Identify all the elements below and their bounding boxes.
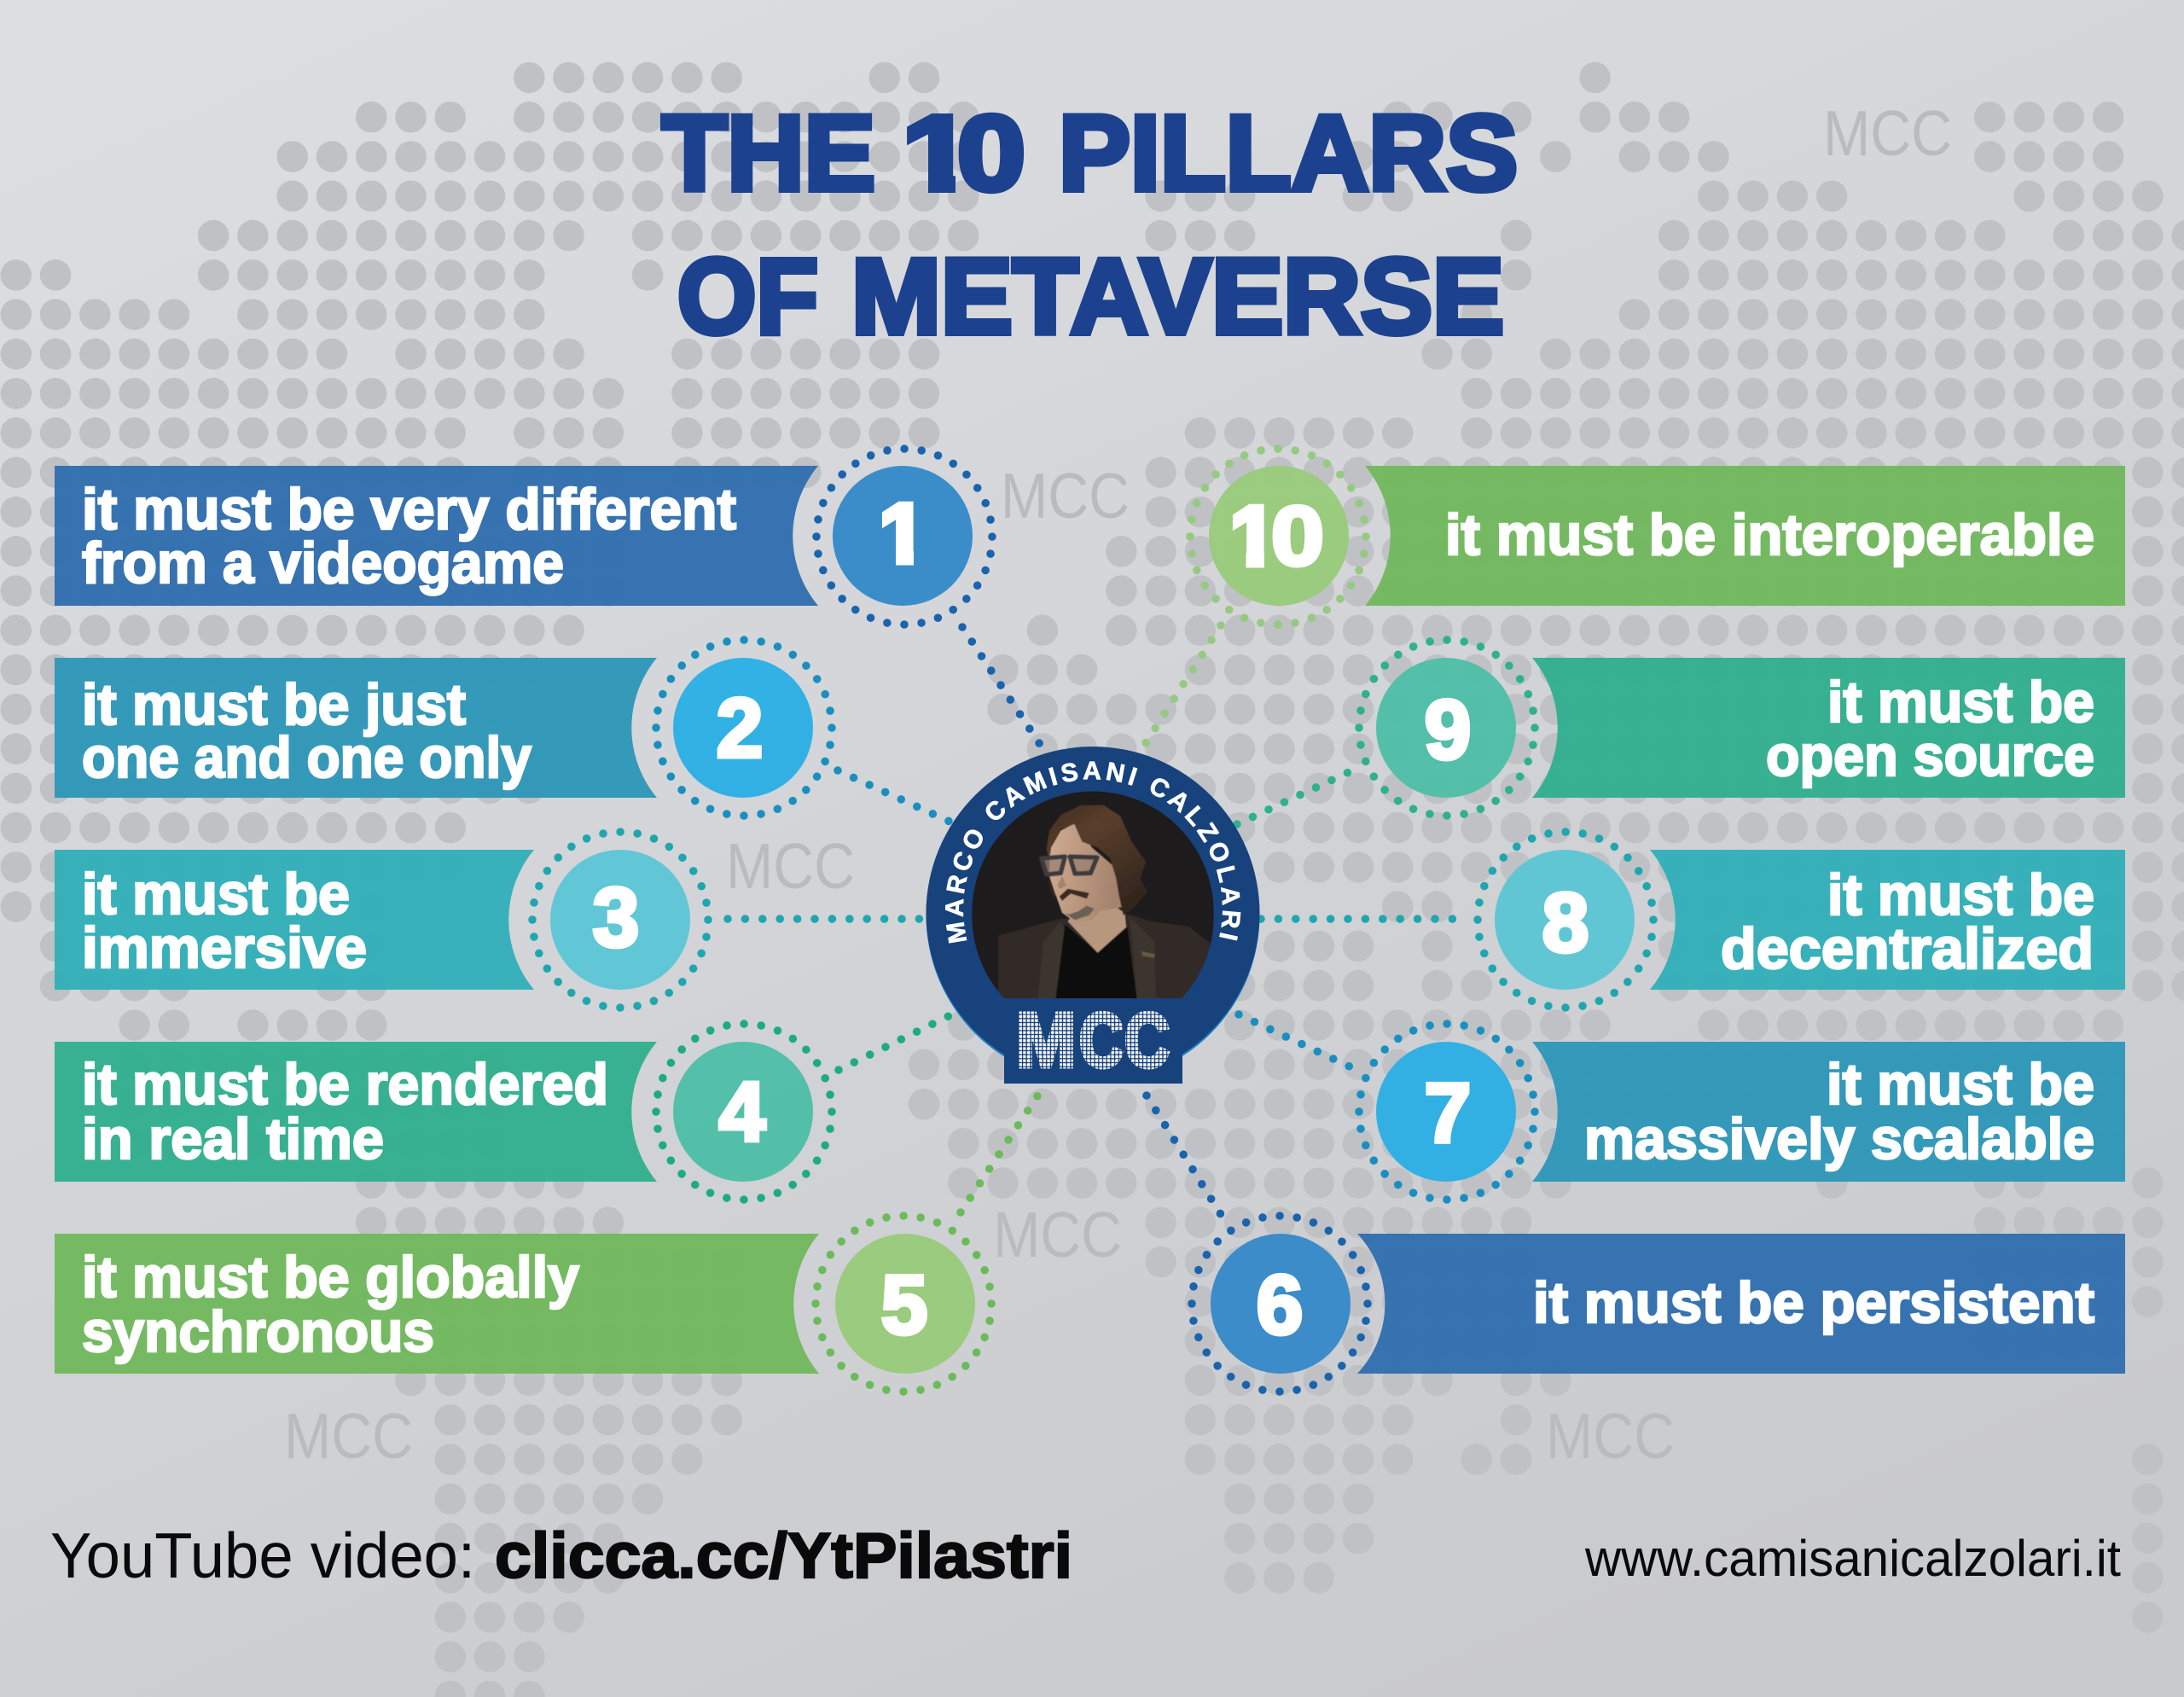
title <box>660 112 1517 337</box>
portrait photo illustration <box>972 792 1214 998</box>
MCC dotted logo <box>1016 998 1170 1084</box>
MCC dotted logo: C <box>1079 998 1124 1084</box>
text 5 <box>82 1245 579 1364</box>
text 8: decentralized <box>1721 916 2094 981</box>
title: 1 <box>902 94 973 213</box>
text 4 <box>82 1052 608 1171</box>
text 9: it must be <box>1827 670 2094 735</box>
bar 3 <box>55 850 534 990</box>
text 8: it must be <box>1827 863 2094 927</box>
bar 5 <box>55 1234 819 1374</box>
face <box>1049 823 1122 922</box>
text 7: it must be <box>1827 1052 2094 1117</box>
text 1: from a videogame <box>82 531 564 596</box>
watermarks: MCC: MCC <box>1546 1400 1675 1472</box>
MCC dotted logo: M <box>1016 998 1076 1084</box>
text 3: immersive <box>82 915 367 980</box>
goatee <box>1065 906 1095 920</box>
text 7: massively scalable <box>1584 1107 2094 1171</box>
connector lines from pillars to central badge <box>728 625 1459 1216</box>
number 7: 7 <box>1425 1066 1471 1159</box>
text 4: in real time <box>82 1107 384 1171</box>
footer: YouTube link <box>50 1520 1072 1591</box>
ring 6 <box>1192 1216 1368 1392</box>
pillar 1 <box>55 449 992 625</box>
ring 8 <box>1478 832 1653 1008</box>
text 3 <box>82 862 367 980</box>
bar 10 <box>1365 466 2125 606</box>
hair back <box>1048 873 1056 898</box>
bar 9 <box>1532 658 2125 798</box>
number 5: 5 <box>881 1258 927 1351</box>
circle 9 <box>1376 658 1516 798</box>
text 1 <box>82 477 736 596</box>
circle 6 <box>1211 1234 1350 1374</box>
MCC dotted logo: C <box>1124 998 1170 1084</box>
text 2: it must be just <box>82 672 466 737</box>
central badge <box>926 747 1259 1084</box>
ring 4 <box>656 1024 832 1200</box>
badge logo plate <box>1004 998 1182 1084</box>
ring 10 <box>1190 449 1366 625</box>
pillar 8 <box>1478 832 2125 1008</box>
ring 3 <box>532 832 708 1008</box>
badge disc <box>926 747 1259 1080</box>
watermarks: MCC <box>284 97 1952 1472</box>
title: THE <box>662 94 875 213</box>
title: METAVERSE <box>851 237 1504 357</box>
text 1: it must be very different <box>82 477 736 542</box>
title: PILLARS <box>1059 94 1518 213</box>
text 2 <box>82 672 531 790</box>
text 9: open source <box>1766 724 2094 788</box>
text 5: synchronous <box>82 1299 434 1364</box>
text 7 <box>1584 1052 2094 1171</box>
pillar 3 <box>55 832 708 1008</box>
pillar 7 <box>1359 1024 2125 1200</box>
text 2: one and one only <box>82 725 531 790</box>
text 9 <box>1766 670 2094 788</box>
ring 5 <box>816 1216 991 1392</box>
circle 4 <box>673 1042 813 1182</box>
footer: YouTube link: YouTube video: <box>50 1520 475 1591</box>
pillar 5 <box>55 1216 991 1392</box>
watermarks: MCC: MCC <box>726 830 855 902</box>
circle 10 <box>1209 466 1349 606</box>
circle 3 <box>550 850 690 990</box>
number 1: 1 <box>880 486 926 580</box>
bar 8 <box>1650 850 2125 990</box>
ring 7 <box>1359 1024 1535 1200</box>
watermarks: MCC: MCC <box>993 1199 1122 1270</box>
lapels <box>1039 918 1155 998</box>
number 10: 0 <box>1271 489 1324 583</box>
circle 7 <box>1376 1042 1516 1182</box>
badge edge <box>926 749 1259 1082</box>
pillar 6 <box>1192 1216 2125 1392</box>
text 5: it must be globally <box>82 1245 579 1310</box>
number 3: 3 <box>593 870 639 964</box>
pin <box>1141 951 1155 958</box>
text 3: it must be <box>82 862 350 927</box>
pillar 10 <box>1190 449 2125 625</box>
hair <box>1047 805 1147 915</box>
ring 1 <box>816 449 992 625</box>
footer: website: www.camisanicalzolari.it <box>1584 1530 2121 1587</box>
pillar 4 <box>55 1024 832 1200</box>
pillar 2 <box>55 640 832 816</box>
title: 0 <box>957 94 1025 213</box>
bar 4 <box>55 1042 657 1182</box>
circle 8 <box>1495 850 1635 990</box>
ring 9 <box>1359 640 1535 816</box>
shirt <box>1055 924 1137 1004</box>
text 4: it must be rendered <box>82 1052 608 1117</box>
ring 2 <box>656 640 832 816</box>
jacket <box>998 915 1211 998</box>
watermarks: MCC: MCC <box>284 1400 413 1472</box>
bar 7 <box>1532 1042 2125 1182</box>
number 8: 8 <box>1542 875 1589 969</box>
circle 5 <box>835 1234 975 1374</box>
number 4: 4 <box>719 1065 765 1159</box>
badge name on arc: MARCO CAMISANI CALZOLARI <box>945 761 1240 944</box>
number 10 <box>1232 503 1322 568</box>
number 6: 6 <box>1257 1258 1303 1351</box>
text 10: it must be interoperable <box>1445 503 2094 567</box>
title: OF <box>677 237 818 357</box>
number 9: 9 <box>1425 683 1471 776</box>
bar 6 <box>1357 1234 2125 1374</box>
text 8 <box>1721 863 2094 981</box>
circle 1 <box>833 466 973 606</box>
watermarks: MCC: MCC <box>1823 97 1952 169</box>
glasses <box>1042 857 1097 875</box>
number 2: 2 <box>717 681 763 775</box>
moustache <box>1060 889 1089 901</box>
bar 1 <box>55 466 818 606</box>
neck <box>1068 906 1126 953</box>
number 10: 1 <box>1230 489 1276 583</box>
text 6: it must be persistent <box>1533 1270 2094 1335</box>
bar 2 <box>55 658 657 798</box>
footer: YouTube link: clicca.cc/YtPilastri <box>495 1520 1072 1591</box>
watermarks: MCC: MCC <box>1001 460 1130 532</box>
nose shadow <box>1058 876 1066 889</box>
pillar 9 <box>1359 640 2125 816</box>
circle 2 <box>673 658 813 798</box>
